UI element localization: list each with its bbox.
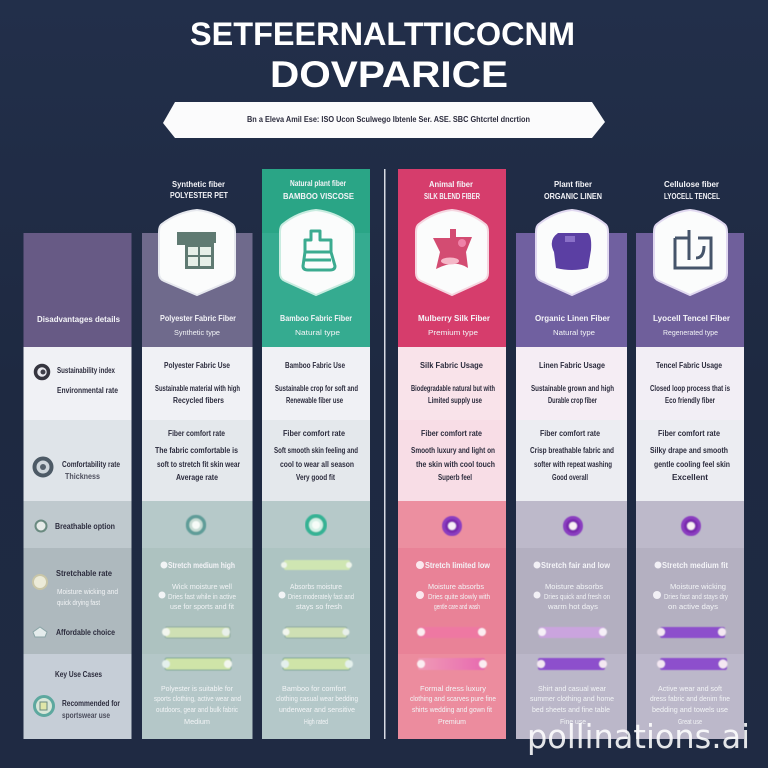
row 1 text xyxy=(155,361,240,405)
row 4 text: Stretch medium high xyxy=(168,561,235,570)
row 2 text: Soft smooth skin feeling and xyxy=(274,446,358,455)
rating bar xyxy=(538,627,607,638)
row 5 labels: Recommended for xyxy=(62,699,120,708)
row 4 text: Moisture absorbs xyxy=(545,582,603,591)
row 2 text: gentle cooling feel skin xyxy=(654,460,730,469)
row 2 text: Smooth luxury and light on xyxy=(411,446,495,455)
icon: row 2 xyxy=(34,458,52,476)
row 1 text: Durable crop fiber xyxy=(548,396,597,405)
row 4b label: Affordable choice xyxy=(56,628,115,637)
row 4 text xyxy=(416,561,491,611)
row 5 text: Bamboo for comfort xyxy=(282,684,347,693)
column 3 title: SILK BLEND FIBER xyxy=(424,192,480,201)
row 4 text: Wick moisture well xyxy=(172,582,232,591)
row 2 text xyxy=(411,429,495,482)
row 1 text: Sustainable crop for soft and xyxy=(275,384,358,393)
row 1 text: Limited supply use xyxy=(428,396,482,405)
row 1 text: Biodegradable natural but with xyxy=(411,384,495,393)
row 5 text: clothing casual wear bedding xyxy=(276,694,358,703)
column 4 title: Plant fiber xyxy=(554,180,592,189)
column 1 header text: Polyester Fabric Fiber xyxy=(160,314,236,323)
row 5 text: Shirt and casual wear xyxy=(538,684,606,693)
row 5 text: outdoors, gear and bulk fabric xyxy=(156,705,238,714)
icon: row 4b xyxy=(33,627,47,637)
column 5 title: LYOCELL TENCEL xyxy=(664,192,720,201)
column 5 header text: Lyocell Tencel Fiber xyxy=(653,314,730,323)
icon: row 4 xyxy=(33,575,47,589)
row 4 text: Dries quick and fresh on xyxy=(544,592,610,601)
row 4 text: Dries quite slowly with xyxy=(428,592,490,601)
row 2 text: Very good fit xyxy=(296,473,335,482)
column 4 title xyxy=(544,180,602,201)
row 5 text: shirts wedding and gown fit xyxy=(412,705,493,714)
column 2 header text: Natural type xyxy=(295,328,340,337)
row 5 text xyxy=(154,684,241,726)
row 5 text: dress fabric and denim fine xyxy=(650,694,730,703)
column 1 title xyxy=(170,180,228,200)
watermark: pollinations.ai xyxy=(527,717,750,756)
row 1 text: Closed loop process that is xyxy=(650,384,730,393)
row 2 text: Silky drape and smooth xyxy=(650,446,728,455)
row 4 text: Absorbs moisture xyxy=(290,582,342,591)
row 5 text: Formal dress luxury xyxy=(420,684,486,693)
row 2 text: Superb feel xyxy=(438,473,472,482)
column 5 header text: Regenerated type xyxy=(663,328,718,337)
row 4 labels: Moisture wicking and xyxy=(57,587,118,596)
row 5 text: summer clothing and home xyxy=(530,694,614,703)
column 4 title: ORGANIC LINEN xyxy=(544,192,602,201)
column 4 header text xyxy=(535,314,610,337)
row 5 text xyxy=(410,684,496,726)
rating dot xyxy=(307,516,325,534)
icon: row 3 xyxy=(36,520,46,532)
rating dot xyxy=(682,518,700,534)
row 2 text: The fabric comfortable is xyxy=(155,446,238,455)
row 4 text: Dries fast and stays dry xyxy=(664,592,728,601)
column 5 header text xyxy=(653,314,730,337)
panel: column 3 pink xyxy=(398,169,506,739)
panel: column 4 purple xyxy=(516,180,627,739)
row 4 text: on active days xyxy=(668,602,718,611)
rating bar xyxy=(657,658,728,670)
row 5 text: Active wear and soft xyxy=(658,684,723,693)
column 5 title xyxy=(664,180,720,201)
icon badge: column 1 xyxy=(159,210,235,295)
rating bar xyxy=(537,658,607,670)
row 2 text: Fiber comfort rate xyxy=(540,429,600,438)
row 1 text: Eco friendly fiber xyxy=(665,396,715,405)
rating bar xyxy=(281,658,353,670)
panel: row labels column xyxy=(24,233,132,739)
column 2 header text: Bamboo Fabric Fiber xyxy=(280,314,352,323)
row 1 text: Polyester Fabric Use xyxy=(164,361,230,370)
row 2 text xyxy=(650,429,730,482)
row 2 text: the skin with cool touch xyxy=(416,460,495,469)
row 1 text: Tencel Fabric Usage xyxy=(656,361,722,370)
row 1 labels: Sustainability index xyxy=(57,366,115,375)
panel: column 5 purple xyxy=(636,180,744,739)
row 4 labels xyxy=(56,569,118,607)
row 4 text: warm hot days xyxy=(547,602,598,611)
column 2 title xyxy=(283,179,355,201)
row 5 text xyxy=(276,684,358,726)
row 2 text: soft to stretch fit skin wear xyxy=(157,460,240,469)
row 4 text: Dries moderately fast and xyxy=(288,592,354,601)
rating dot xyxy=(188,516,204,534)
row 5 text: Medium xyxy=(184,717,210,726)
row 5 labels xyxy=(62,699,120,720)
row 2 text xyxy=(274,429,358,482)
row 1 labels xyxy=(57,366,118,395)
row 5 text: Polyester is suitable for xyxy=(161,684,233,693)
column 1 title: Synthetic fiber xyxy=(172,180,225,189)
row 2 text xyxy=(155,429,240,482)
column 4 header text: Natural type xyxy=(553,328,595,337)
subtitle banner: Bn a Eleva Amil Ese: ISO Ucon Sculwego Ibtenle Ser. ASE. SBC Ghtcrtel dncrtion xyxy=(247,115,530,124)
row 2 text: Fiber comfort rate xyxy=(658,429,720,438)
row 2 text: Average rate xyxy=(176,473,218,482)
row 1 text xyxy=(531,361,614,405)
column 1 header text: Synthetic type xyxy=(174,328,220,337)
row 3 label: Breathable option xyxy=(55,522,115,531)
row 5 text: clothing and scarves pure fine xyxy=(410,694,496,703)
rating bar xyxy=(281,560,352,570)
rating bar xyxy=(162,658,232,670)
column 2 title: Natural plant fiber xyxy=(290,179,346,188)
icon: row 1 xyxy=(36,366,48,378)
row 2 text: softer with repeat washing xyxy=(534,460,612,469)
row 4 text: Moisture absorbs xyxy=(428,582,484,591)
column 1 header text xyxy=(160,314,236,337)
title xyxy=(190,16,575,95)
row 2 text: Crisp breathable fabric and xyxy=(530,446,614,455)
icon: row 5 xyxy=(34,696,54,716)
row 2 labels xyxy=(62,460,120,481)
rating bar xyxy=(657,627,726,638)
row 1 text: Silk Fabric Usage xyxy=(420,361,484,370)
rating bar xyxy=(282,627,350,638)
row 1 text xyxy=(275,361,358,405)
row 4 labels: quick drying fast xyxy=(57,598,101,607)
row 4 text: stays so fresh xyxy=(296,602,342,611)
row 4 text xyxy=(534,561,611,611)
column 1 title: POLYESTER PET xyxy=(170,191,228,200)
column 3 header text xyxy=(418,314,490,337)
title: SETFEERNALTTICOCNM xyxy=(190,16,575,52)
icon badge: column 5 xyxy=(654,210,727,295)
row 2 text: cool to wear all season xyxy=(280,460,354,469)
row 2 labels: Comfortability rate xyxy=(62,460,120,469)
row 4 text: gentle care and wash xyxy=(434,602,480,611)
row 1 text: Sustainable grown and high xyxy=(531,384,614,393)
row 5 text: bed sheets and fine table xyxy=(532,705,610,714)
column 2 title: BAMBOO VISCOSE xyxy=(283,192,355,201)
title: DOVPARICE xyxy=(270,54,508,95)
row 5 text: Fine use xyxy=(560,717,586,726)
row 1 text: Recycled fibers xyxy=(173,396,224,405)
row 2 text: Excellent xyxy=(672,473,708,482)
icon badge: column 3 xyxy=(416,210,488,295)
row 4 text: use for sports and fit xyxy=(170,602,235,611)
column 3 header text: Premium type xyxy=(428,328,478,337)
row 2 text: Fiber comfort rate xyxy=(168,429,225,438)
divider line xyxy=(384,169,386,739)
row 4 text: Stretch limited low xyxy=(425,561,491,570)
rating bar xyxy=(417,658,487,670)
row 5 text xyxy=(650,684,730,726)
column 3 header text: Mulberry Silk Fiber xyxy=(418,314,490,323)
row 4 text xyxy=(278,582,354,611)
row 5 text: Great use xyxy=(678,717,702,726)
row 4 labels: Stretchable rate xyxy=(56,569,113,578)
row 1 text xyxy=(650,361,730,405)
row 1 text xyxy=(411,361,495,405)
row 2 labels: Thickness xyxy=(65,472,100,481)
row 5 text xyxy=(530,684,614,726)
row 1 labels: Environmental rate xyxy=(57,386,118,395)
rating dot xyxy=(444,518,460,534)
row 4 text: Stretch medium fit xyxy=(662,561,728,570)
panel: column 1 gray xyxy=(142,180,252,739)
row 4 text xyxy=(158,561,236,611)
row 1 text: Linen Fabric Usage xyxy=(539,361,605,370)
column 2 header text xyxy=(280,314,352,337)
row 2 text xyxy=(530,429,614,482)
row 5 text: bedding and towels use xyxy=(652,705,728,714)
icon badge: column 4 xyxy=(536,210,608,295)
rating bar xyxy=(417,627,486,638)
rating bar xyxy=(162,627,230,638)
row 1 text: Sustainable material with high xyxy=(155,384,240,393)
subtitle banner xyxy=(163,102,605,138)
row 5 text: sports clothing, active wear and xyxy=(154,694,241,703)
row 4 text xyxy=(653,561,728,611)
row 5 text: High rated xyxy=(304,717,328,726)
row 2 text: Fiber comfort rate xyxy=(421,429,482,438)
row header label: Disadvantages details xyxy=(37,315,121,324)
row 5 text: underwear and sensitive xyxy=(279,705,355,714)
rating dot xyxy=(564,518,582,534)
column 3 title: Animal fiber xyxy=(429,180,473,189)
icon badge: column 2 xyxy=(280,210,354,295)
row 2 text: Good overall xyxy=(552,473,588,482)
row 5 label: Key Use Cases xyxy=(55,670,102,679)
row 2 text: Fiber comfort rate xyxy=(283,429,345,438)
column 5 title: Cellulose fiber xyxy=(664,180,719,189)
row 4 text: Moisture wicking xyxy=(670,582,726,591)
row 1 text: Renewable fiber use xyxy=(286,396,343,405)
row 5 text: Premium xyxy=(438,717,466,726)
column 4 header text: Organic Linen Fiber xyxy=(535,314,610,323)
row 4 text: Stretch fair and low xyxy=(541,561,611,570)
row 4 text: Dries fast while in active xyxy=(168,592,236,601)
row 5 labels: sportswear use xyxy=(62,711,110,720)
column 3 title xyxy=(424,180,480,201)
row 1 text: Bamboo Fabric Use xyxy=(285,361,345,370)
panel: column 2 green xyxy=(262,169,370,739)
